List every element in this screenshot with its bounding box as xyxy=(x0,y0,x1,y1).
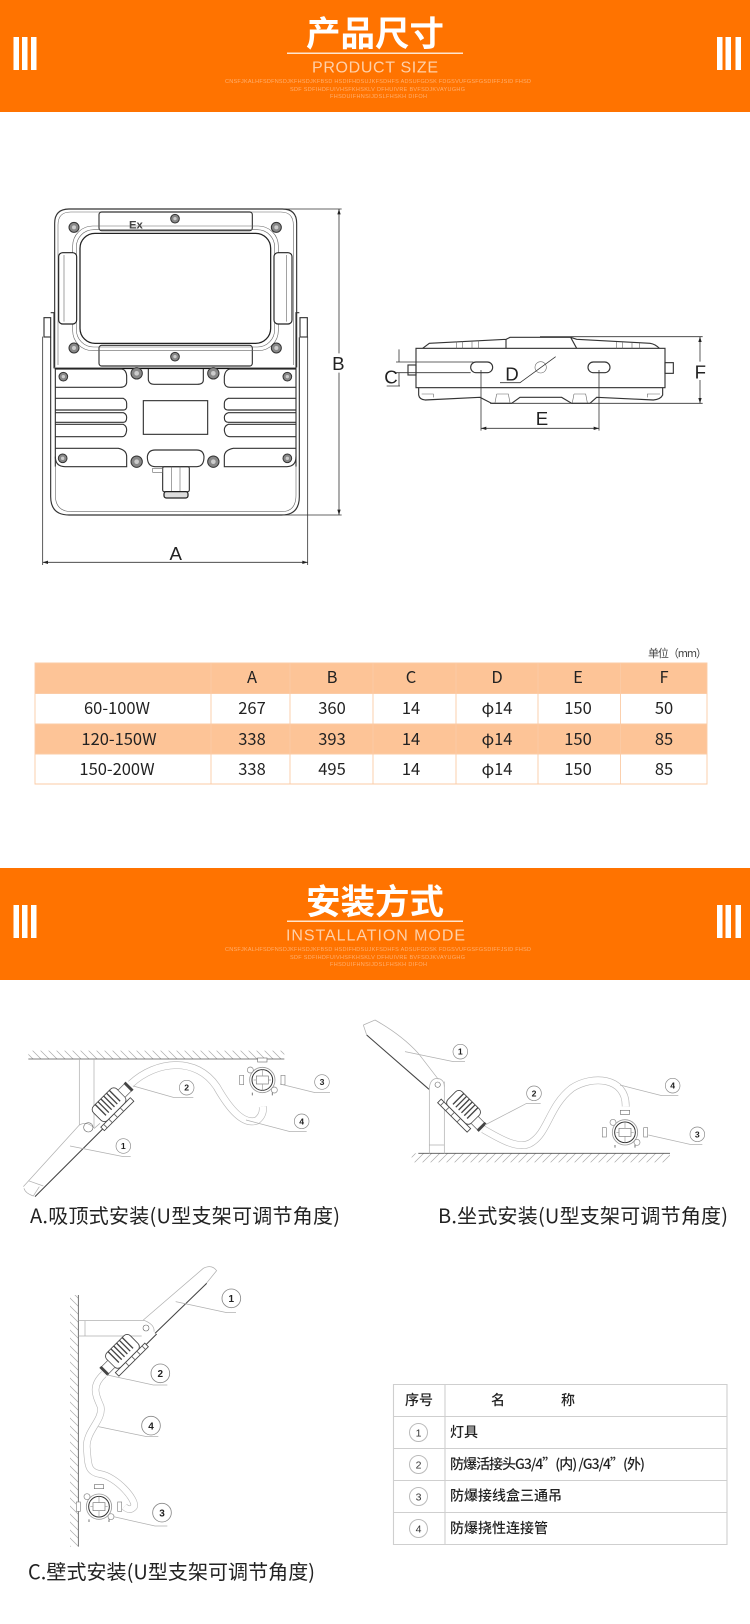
table grid xyxy=(35,663,707,784)
row 60-100W: 50 xyxy=(655,695,673,719)
row 120-150W: 14 xyxy=(402,726,420,750)
callout 2 xyxy=(133,1080,194,1097)
row 150-200W: 85 xyxy=(655,756,673,780)
table header: D xyxy=(491,664,503,688)
junction box xyxy=(240,1058,285,1095)
legend row 2: 2 xyxy=(416,1460,422,1472)
callout 3: 3 xyxy=(695,1129,700,1139)
subheading: PRODUCT SIZE xyxy=(312,60,438,76)
legend row 4: 防爆挠性连接管 xyxy=(450,1518,548,1538)
lamp body xyxy=(363,1020,438,1089)
callout 1 xyxy=(70,1139,131,1157)
callout 3 xyxy=(648,1127,705,1144)
legend row 2: 防爆活接头G3/4”(内) /G3/4”(外) xyxy=(450,1454,645,1474)
wall mount diagram C xyxy=(70,1267,241,1547)
row 120-150W: 85 xyxy=(655,726,673,750)
callout 2: 2 xyxy=(532,1088,537,1098)
hose xyxy=(131,1065,263,1121)
icon: left bars xyxy=(14,905,36,938)
dimension B xyxy=(183,209,345,515)
row 150-200W: 495 xyxy=(318,756,346,780)
table header: C xyxy=(406,664,416,688)
callout 3 xyxy=(113,1503,171,1526)
fine print: FHSDUIFHNSIJDSLFHSKH DIFOH xyxy=(330,94,427,100)
legend row 1: 灯具 xyxy=(450,1422,478,1442)
row 60-100W: 14 xyxy=(402,695,420,719)
table stripes xyxy=(35,663,707,754)
dimension E xyxy=(481,370,599,431)
row 60-100W: φ14 xyxy=(482,695,512,719)
bracket xyxy=(79,1059,94,1127)
heading underline xyxy=(287,920,463,922)
legend header xyxy=(405,1390,575,1410)
row 60-100W: 360 xyxy=(318,695,346,719)
callout 3: 3 xyxy=(320,1077,325,1087)
row 60-100W xyxy=(84,695,673,719)
fine print xyxy=(225,947,531,968)
parts legend table xyxy=(394,1384,727,1544)
heading: product size: 产品尺寸 xyxy=(306,6,444,56)
hose xyxy=(87,1374,134,1509)
wall xyxy=(70,1295,78,1547)
fine print: FHSDUIFHNSIJDSLFHSKH DIFOH xyxy=(330,962,427,968)
icon: right bars xyxy=(717,905,741,938)
lamp lower heat-sink body xyxy=(55,368,296,467)
callout 2 xyxy=(485,1086,541,1125)
callout 1: 1 xyxy=(229,1294,235,1305)
table header: B xyxy=(327,664,338,688)
heading: installation mode: 安装方式 xyxy=(306,874,444,924)
icon: right bars xyxy=(717,37,741,70)
row 60-100W: 267 xyxy=(238,695,266,719)
fine print xyxy=(225,79,531,100)
caption A: A.吸顶式安装(U型支架可调节角度) xyxy=(30,1200,340,1229)
legend row 4: 4 xyxy=(416,1524,422,1536)
legend header: 序号 xyxy=(405,1390,433,1410)
row 60-100W: 150 xyxy=(564,695,592,719)
caption C: C.壁式安装(U型支架可调节角度) xyxy=(28,1556,315,1585)
icon: left bars xyxy=(14,37,36,70)
callout 4 xyxy=(98,1416,160,1437)
callout 4: 4 xyxy=(148,1421,154,1432)
fitting head xyxy=(96,1329,148,1382)
dimension F: F xyxy=(695,361,706,382)
stand xyxy=(429,1078,444,1153)
row 120-150W: 120-150W xyxy=(81,726,157,750)
arm xyxy=(78,1321,145,1336)
callout 4: 4 xyxy=(299,1116,304,1126)
callout 3: 3 xyxy=(159,1508,165,1519)
callout 1 xyxy=(405,1044,468,1062)
fitting head xyxy=(87,1078,139,1131)
table header: F xyxy=(659,664,669,688)
row 150-200W: 150-200W xyxy=(79,756,155,780)
dimension A: A xyxy=(169,543,182,564)
lamp upper housing xyxy=(55,209,297,367)
junction box xyxy=(76,1485,122,1522)
dimension E: E xyxy=(536,408,548,429)
row 120-150W: 150 xyxy=(564,726,592,750)
dimension C: C xyxy=(384,366,398,387)
lamp body xyxy=(120,1267,217,1371)
lamp upper housing: Ex xyxy=(129,219,144,231)
fine print: CNSFJKALHFSDFNSDJKFHSDJKFBSD HSDIFHDSUJKFSDHFS ADSUFGDSK FDGSVUFGSFGSDIFFJSID FHSD xyxy=(225,947,531,953)
dimension B: B xyxy=(332,353,345,374)
caption B: B.坐式安装(U型支架可调节角度) xyxy=(438,1200,728,1229)
callout 4 xyxy=(620,1078,680,1096)
header band: product size xyxy=(0,0,750,112)
table header xyxy=(247,664,669,688)
callout 1: 1 xyxy=(458,1047,463,1057)
legend row 1 xyxy=(410,1422,478,1442)
dimension A xyxy=(43,337,308,565)
header band: installation mode xyxy=(0,868,750,980)
legend header: 称 xyxy=(561,1390,575,1410)
ceiling xyxy=(28,1051,284,1059)
fine print: SDF SDFIHDFUIVHSFKHSKLV DFHUIVRE BVFSDJKVAYUGHG xyxy=(290,87,465,93)
legend header: 名 xyxy=(491,1390,505,1410)
table header: A xyxy=(247,664,257,688)
table header: E xyxy=(573,664,583,688)
row 60-100W: 60-100W xyxy=(84,695,151,719)
heading underline xyxy=(287,52,463,54)
dimension F xyxy=(490,337,706,403)
row 150-200W: 338 xyxy=(238,756,266,780)
dimension C xyxy=(384,349,473,387)
floor mount diagram B xyxy=(363,1020,705,1162)
dimension table xyxy=(35,663,707,784)
row 120-150W: φ14 xyxy=(482,726,512,750)
U-shaped bracket xyxy=(44,313,307,515)
lamp body xyxy=(23,1100,132,1197)
row 120-150W: 393 xyxy=(318,726,346,750)
callout 4 xyxy=(246,1114,309,1132)
dimension D xyxy=(500,357,556,385)
row 150-200W xyxy=(79,756,673,780)
callout 3 xyxy=(280,1075,330,1093)
unit note: 单位（mm） xyxy=(648,645,707,661)
row 120-150W: 338 xyxy=(238,726,266,750)
ceiling mount diagram A xyxy=(23,1051,330,1197)
floor xyxy=(412,1153,670,1162)
legend row 3: 防爆接线盒三通吊 xyxy=(450,1486,562,1506)
fine print: CNSFJKALHFSDFNSDJKFHSDJKFBSD HSDIFHDSUJKFSDHFS ADSUFGDSK FDGSVUFGSFGSDIFFJSID FHSD xyxy=(225,79,531,85)
side view dimension drawing xyxy=(384,337,706,431)
callout 2: 2 xyxy=(158,1369,164,1380)
junction box xyxy=(602,1110,648,1148)
fine print: SDF SDFIHDFUIVHSFKHSKLV DFHUIVRE BVFSDJKVAYUGHG xyxy=(290,955,465,961)
row 120-150W xyxy=(81,726,673,750)
row 150-200W: 14 xyxy=(402,756,420,780)
callout 4: 4 xyxy=(670,1081,675,1091)
fitting head xyxy=(438,1085,490,1138)
callout 2: 2 xyxy=(184,1083,189,1093)
legend grid xyxy=(394,1384,727,1544)
row 150-200W: φ14 xyxy=(482,756,512,780)
callout 2 xyxy=(107,1364,170,1385)
dimension D: D xyxy=(505,364,519,385)
cable gland xyxy=(153,467,189,498)
front view dimension drawing xyxy=(43,209,345,565)
lamp side profile xyxy=(408,337,673,403)
hose xyxy=(483,1080,626,1145)
row 150-200W: 150 xyxy=(564,756,592,780)
legend row 3: 3 xyxy=(416,1492,422,1504)
legend row 1: 1 xyxy=(416,1428,422,1440)
mounting screws xyxy=(58,214,292,467)
subheading: INSTALLATION MODE xyxy=(286,928,465,944)
callout 1: 1 xyxy=(121,1141,126,1151)
callout 1 xyxy=(176,1289,241,1313)
